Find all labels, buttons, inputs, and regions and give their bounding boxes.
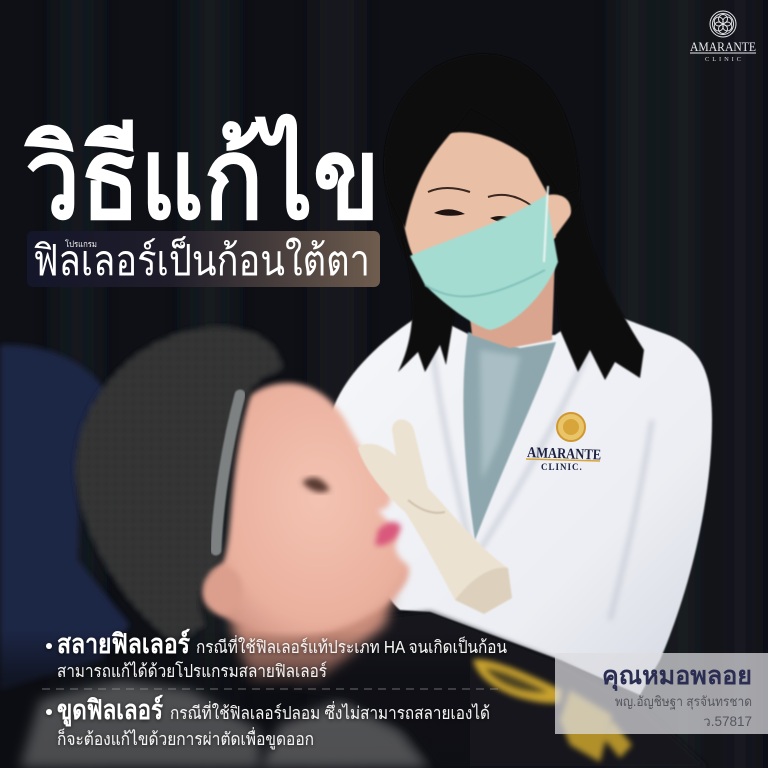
subtitle text: ฟิลเลอร์เป็นก้อนใต้ตา bbox=[33, 236, 370, 284]
heading: ขูดฟิลเลอร์ bbox=[57, 694, 163, 727]
doctor hand and glove bbox=[358, 420, 512, 614]
small label: โปรแกรม bbox=[65, 239, 97, 249]
doctor hair front bbox=[384, 54, 578, 228]
description line 2: สามารถแก้ได้ด้วยโปรแกรมสลายฟิลเลอร์ bbox=[57, 661, 327, 681]
heading: สลายฟิลเลอร์ bbox=[57, 628, 190, 659]
patient headband bbox=[216, 395, 240, 550]
doctor hair left strands bbox=[398, 235, 455, 372]
doctor nickname: คุณหมอพลอย bbox=[602, 662, 752, 692]
logo bbox=[690, 11, 756, 63]
patient lips bbox=[375, 522, 401, 546]
shirt bbox=[290, 612, 708, 768]
doctor coat bbox=[330, 308, 712, 695]
photo: chair bbox=[0, 345, 130, 690]
patient neck bbox=[230, 590, 395, 680]
doctor neck bbox=[468, 255, 555, 348]
doctor eyes bbox=[428, 188, 532, 224]
doctor blouse bbox=[463, 332, 556, 540]
coat logo bbox=[526, 413, 601, 472]
patient eye bbox=[302, 478, 330, 492]
description line 2: ก็จะต้องแก้ไขด้วยการผ่าตัดเพื่อขูดออก bbox=[57, 727, 314, 750]
license number: ว.57817 bbox=[703, 714, 752, 729]
photo: patient bottom clothes bbox=[20, 612, 708, 768]
bullet bbox=[46, 643, 52, 649]
subtitle pill bbox=[27, 231, 380, 287]
bullet bbox=[46, 709, 52, 715]
info block: remove filler bbox=[46, 694, 490, 750]
doctor face bbox=[403, 132, 571, 318]
patient face bbox=[209, 383, 409, 636]
info block: dissolve filler bbox=[46, 628, 507, 681]
doctor credit panel bbox=[555, 653, 768, 734]
doctor hair right strands bbox=[556, 200, 644, 380]
title: วิธีแก้ไข bbox=[23, 114, 380, 243]
logo clinic: CLINIC bbox=[705, 56, 741, 63]
photo: patient head bbox=[76, 327, 409, 680]
bottom text backdrop bbox=[0, 630, 470, 768]
doctor coat shadows bbox=[430, 330, 652, 620]
logo wordmark: AMARANTE bbox=[690, 39, 756, 54]
doctor full name: พญ.อัญชิษฐา สุรจันทรชาด bbox=[615, 694, 752, 710]
pillow bbox=[20, 680, 260, 768]
patient cap bbox=[76, 327, 283, 645]
description line 1: กรณีที่ใช้ฟิลเลอร์ปลอม ซึ่งไม่สามารถสลายเองได้ bbox=[170, 701, 490, 723]
doctor hair back bbox=[384, 54, 580, 300]
logo mark bbox=[710, 11, 736, 37]
coat logo: CLINIC. bbox=[541, 462, 583, 472]
patient ear bbox=[200, 565, 242, 615]
coat logo: AMARANTE bbox=[527, 445, 601, 464]
shirt embroidery bbox=[473, 659, 632, 762]
description line 1: กรณีที่ใช้ฟิลเลอร์แท้ประเภท HA จนเกิดเป็นก้อน bbox=[196, 635, 507, 657]
doctor mask bbox=[410, 186, 558, 330]
photo: doctor bbox=[330, 54, 712, 695]
